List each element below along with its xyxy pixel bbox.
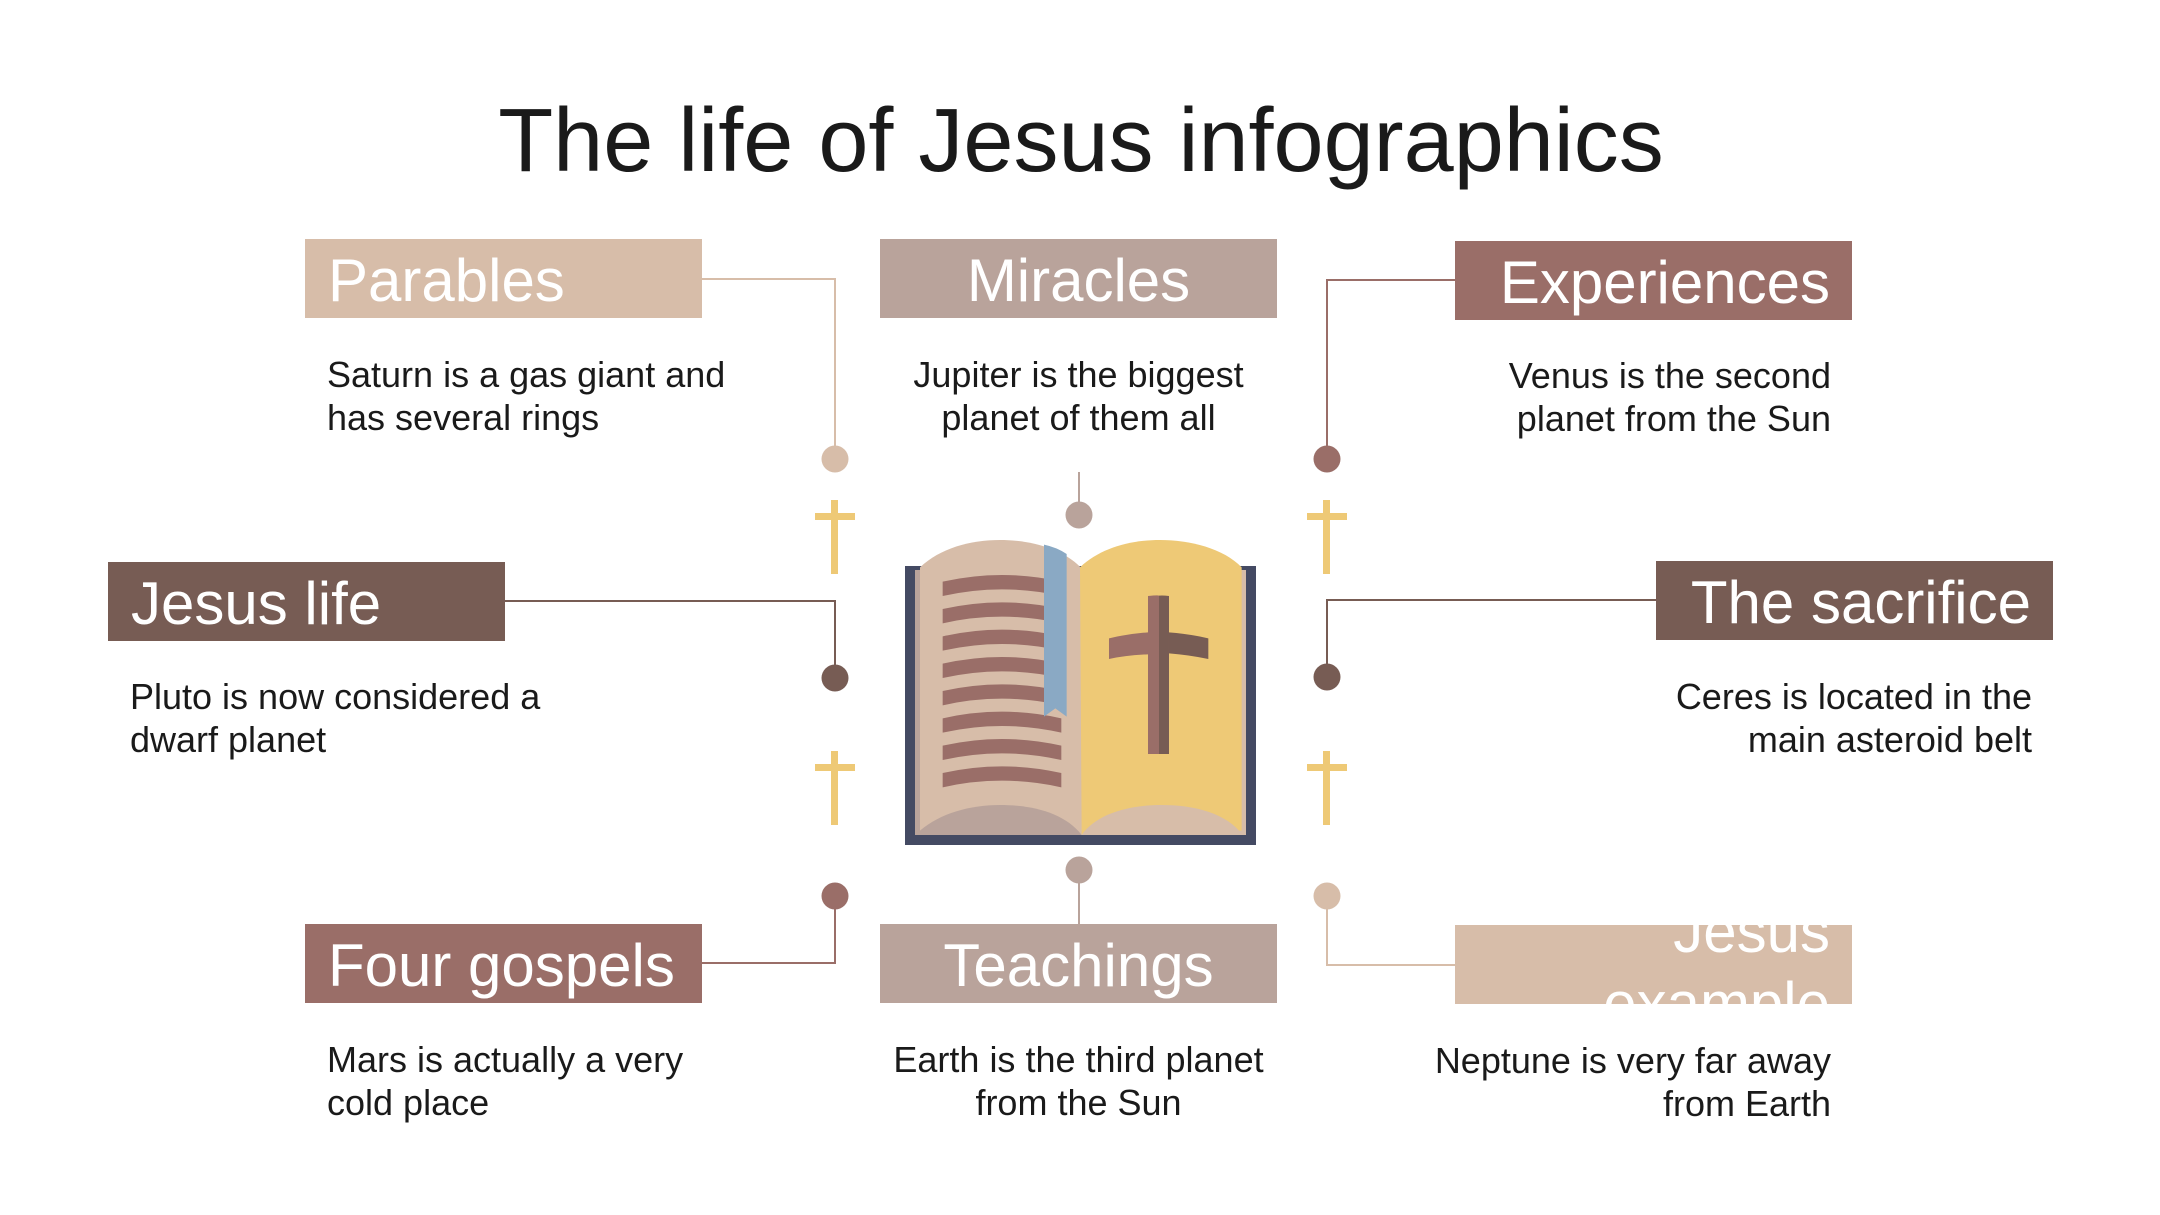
heading: Jesus example (clipped) — [1455, 925, 1852, 1004]
text: Jesus life — [130, 676, 540, 760]
text: Four gospels: Mars is actually a very — [327, 1039, 683, 1080]
text: Jesus life: dwarf planet — [130, 719, 326, 760]
heading: Experiences: Experiences — [1500, 249, 1830, 316]
icon: gold cross top left — [815, 500, 855, 574]
heading: Teachings — [880, 924, 1277, 1003]
text: Jesus example: from Earth — [1663, 1083, 1831, 1124]
text: The sacrifice — [1676, 676, 2032, 760]
heading: Miracles — [880, 239, 1277, 318]
heading: Jesus life — [108, 562, 505, 641]
text: Jesus example: Neptune is very far away — [1435, 1040, 1831, 1081]
text: Parables — [327, 354, 725, 438]
connector: Teachings — [1066, 856, 1092, 924]
connector: The sacrifice — [1314, 600, 1656, 690]
text: Experiences — [1508, 355, 1831, 439]
text: Experiences: Venus is the second — [1509, 355, 1831, 396]
text: Miracles: Jupiter is the biggest — [913, 354, 1244, 395]
connector: Parables — [702, 279, 848, 472]
icon: gold cross top right — [1307, 500, 1347, 574]
text: Four gospels: cold place — [327, 1082, 489, 1123]
text: Teachings: from the Sun — [975, 1082, 1182, 1123]
text: Teachings: Earth is the third planet — [893, 1039, 1264, 1080]
text: Experiences: planet from the Sun — [1517, 398, 1831, 439]
text: Teachings — [893, 1039, 1264, 1123]
heading: Jesus life: Jesus life — [131, 570, 381, 637]
text: Four gospels — [327, 1039, 683, 1123]
icon: gold cross bottom right — [1307, 751, 1347, 825]
heading: The sacrifice: The sacrifice — [1691, 569, 2031, 636]
icon: open book with cross — [905, 540, 1256, 845]
connector: Jesus example — [1314, 882, 1455, 965]
heading: Miracles: Miracles — [967, 247, 1190, 314]
text: Parables: has several rings — [327, 397, 599, 438]
text: Jesus example — [1435, 1040, 1831, 1124]
text: Jesus life: Pluto is now considered a — [130, 676, 540, 717]
connector: Jesus life — [505, 601, 848, 692]
connector: Four gospels — [702, 882, 848, 963]
heading: Parables — [305, 239, 702, 318]
heading: Teachings: Teachings — [943, 932, 1214, 999]
icon: gold cross bottom left — [815, 751, 855, 825]
text: Miracles: planet of them all — [941, 397, 1216, 438]
heading: Four gospels: Four gospels — [328, 932, 675, 999]
connector: Experiences — [1314, 280, 1455, 472]
text: Miracles — [913, 354, 1244, 438]
text: The sacrifice: main asteroid belt — [1748, 719, 2032, 760]
title: The life of Jesus infographics — [498, 91, 1664, 191]
connector: Miracles — [1066, 472, 1092, 528]
heading: Parables: Parables — [328, 247, 565, 314]
text: Parables: Saturn is a gas giant and — [327, 354, 725, 395]
text: The sacrifice: Ceres is located in the — [1676, 676, 2032, 717]
